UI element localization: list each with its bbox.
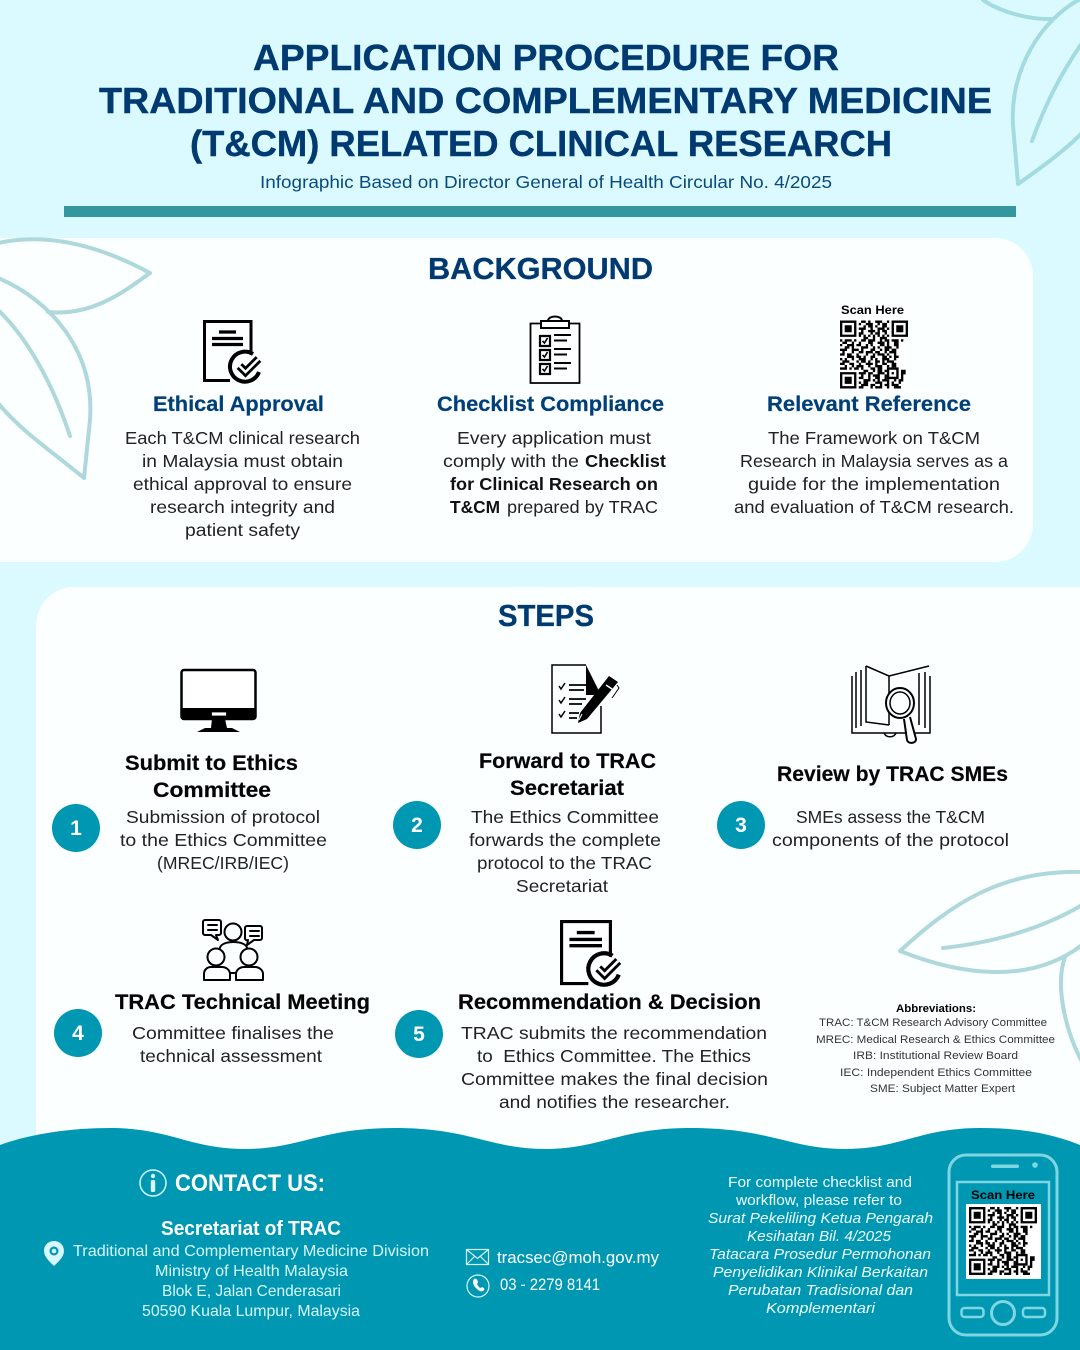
decorative leaf: steps panel xyxy=(900,872,1080,1062)
text: address xyxy=(73,1243,429,1320)
icon: recommendation document with check xyxy=(562,922,619,985)
step number: 5 xyxy=(395,1010,443,1058)
abbreviations: SME: Subject Matter Expert xyxy=(870,1083,1015,1095)
text: complete checklist reference: Tatacara Prosedur Permohonan xyxy=(709,1247,931,1263)
text: ethics committee forwards xyxy=(469,807,661,896)
text: ethical approval: in Malaysia must obtain xyxy=(142,451,343,471)
abbreviations: IEC: Independent Ethics Committee xyxy=(840,1067,1032,1079)
text: ethical approval: patient safety xyxy=(185,520,300,540)
heading: submit to ethics committee: Submit to Ethics xyxy=(125,752,298,775)
icon: computer monitor xyxy=(182,670,256,732)
title divider bar xyxy=(64,206,1016,217)
text: complete checklist reference: Surat Pekeliling Ketua Pengarah xyxy=(708,1211,933,1227)
text: checklist compliance: Checklist xyxy=(585,451,666,471)
text: checklist compliance: comply with the xyxy=(443,451,579,471)
text: trac submits: TRAC submits the recommendation xyxy=(461,1023,767,1043)
panel: background xyxy=(0,238,1033,562)
text: ethical approval: ethical approval to ensure xyxy=(133,474,352,494)
heading: checklist compliance: Checklist Compliance xyxy=(437,393,664,416)
step number: 3: 3 xyxy=(735,814,747,837)
icon: info xyxy=(140,1170,166,1196)
text: ethical approval: Each T&CM clinical research xyxy=(125,428,360,448)
text: address: Traditional and Complementary Medicine Division xyxy=(73,1243,429,1260)
scan here label: Scan Here xyxy=(971,1188,1035,1202)
text: smes assess: components of the protocol xyxy=(772,830,1009,850)
step number: 2: 2 xyxy=(411,814,423,837)
heading: relevant reference: Relevant Reference xyxy=(767,393,971,416)
icon: location pin xyxy=(44,1241,64,1266)
abbreviations: TRAC: T&CM Research Advisory Committee xyxy=(819,1017,1047,1029)
icon: technical meeting group xyxy=(203,920,263,980)
icon: smartphone with qr code xyxy=(949,1155,1057,1335)
panel: steps xyxy=(36,587,1080,1207)
heading: contact us: CONTACT US: xyxy=(175,1170,325,1197)
text: committee finalises: technical assessment xyxy=(140,1046,322,1066)
decorative leaf: top right xyxy=(983,0,1080,184)
title: APPLICATION PROCEDURE FOR xyxy=(253,37,839,78)
text: ethical approval xyxy=(125,428,360,540)
text: trac submits: and notifies the researcher. xyxy=(499,1092,730,1112)
text: smes assess: SMEs assess the T&CM xyxy=(796,807,985,827)
heading: ethical approval: Ethical Approval xyxy=(153,393,324,416)
text: ethics committee forwards: Secretariat xyxy=(516,876,608,896)
text: ethical approval: research integrity and xyxy=(150,497,335,517)
abbreviations xyxy=(816,1003,1055,1095)
heading: forward to trac secretariat: Forward to TRAC xyxy=(479,750,656,773)
text: address: Blok E, Jalan Cenderasari xyxy=(162,1283,341,1300)
text: address: Ministry of Health Malaysia xyxy=(155,1263,348,1280)
text: trac submits xyxy=(461,1023,768,1112)
text: checklist compliance: Every application must xyxy=(457,428,651,448)
abbreviations: Abbreviations: xyxy=(896,1003,976,1015)
heading: secretariat of trac: Secretariat of TRAC xyxy=(161,1218,341,1240)
step 1 xyxy=(52,752,327,873)
heading: forward to trac secretariat: Secretariat xyxy=(510,777,624,800)
icon: open book and magnifier xyxy=(852,666,930,743)
text: complete checklist reference: Kesihatan Bil. 4/2025 xyxy=(747,1229,892,1245)
step number: 4: 4 xyxy=(72,1022,84,1045)
step number: 1: 1 xyxy=(70,817,82,840)
text: complete checklist reference: Penyelidikan Klinikal Berkaitan xyxy=(713,1265,928,1281)
text: submission of protocol: to the Ethics Committee xyxy=(120,830,327,850)
abbreviations: IRB: Institutional Review Board xyxy=(853,1050,1018,1062)
decorative leaf: background panel xyxy=(0,239,150,478)
heading: review by trac smes: Review by TRAC SMEs xyxy=(777,763,1008,786)
text: complete checklist reference: For complete checklist and xyxy=(728,1175,912,1191)
qr code: circular xyxy=(966,1204,1041,1279)
text: address: 50590 Kuala Lumpur, Malaysia xyxy=(142,1303,360,1320)
text: trac submits: to Ethics Committee. The Ethics xyxy=(477,1046,751,1066)
icon: document and pen xyxy=(552,665,619,733)
qr code: relevant reference: Scan Here xyxy=(841,303,904,317)
title xyxy=(99,37,992,164)
step number: 1 xyxy=(52,804,100,852)
text: email: tracsec@moh.gov.my xyxy=(497,1249,660,1267)
text: checklist compliance: for Clinical Research on xyxy=(450,474,658,494)
text: relevant reference xyxy=(734,428,1014,517)
text: checklist compliance: prepared by TRAC xyxy=(507,497,658,517)
text: phone number: 03 - 2279 8141 xyxy=(500,1276,600,1294)
text: trac submits: Committee makes the final decision xyxy=(461,1069,768,1089)
step number: 3 xyxy=(717,801,765,849)
icon: document with check xyxy=(204,322,259,382)
text: ethics committee forwards: The Ethics Committee xyxy=(471,807,659,827)
text: complete checklist reference: workflow, please refer to xyxy=(735,1193,902,1209)
text: complete checklist reference: Perubatan Tradisional dan xyxy=(728,1283,913,1299)
heading: forward to trac secretariat xyxy=(479,750,656,800)
heading: steps: STEPS xyxy=(498,598,594,633)
text: relevant reference: guide for the implementation xyxy=(748,474,1000,494)
text: smes assess xyxy=(772,807,1009,850)
step 2 xyxy=(393,750,661,896)
title: TRADITIONAL AND COMPLEMENTARY MEDICINE xyxy=(99,80,992,121)
step number: 5: 5 xyxy=(413,1023,425,1046)
heading: background: BACKGROUND xyxy=(428,251,653,286)
text: submission of protocol xyxy=(120,807,327,873)
text: committee finalises: Committee finalises the xyxy=(132,1023,334,1043)
text: ethics committee forwards: forwards the complete xyxy=(469,830,661,850)
step 4 xyxy=(54,991,370,1066)
step 3 xyxy=(717,763,1009,850)
text: relevant reference: and evaluation of T&CM research. xyxy=(734,497,1014,517)
text: complete checklist reference: Komplementari xyxy=(766,1301,876,1317)
qr code: relevant reference xyxy=(840,303,908,389)
heading: submit to ethics committee: Committee xyxy=(153,779,271,802)
heading: submit to ethics committee xyxy=(125,752,298,802)
subtitle: Infographic Based on Director General of Health Circular No. 4/2025 xyxy=(260,172,832,192)
text: submission of protocol: (MREC/IRB/IEC) xyxy=(157,853,289,873)
text: complete checklist reference xyxy=(708,1175,933,1317)
step number: 2 xyxy=(393,801,441,849)
title: (T&CM) RELATED CLINICAL RESEARCH xyxy=(190,123,892,164)
text: ethics committee forwards: protocol to the TRAC xyxy=(477,853,652,873)
heading: trac technical meeting: TRAC Technical Meeting xyxy=(115,991,370,1014)
text: checklist compliance: T&CM xyxy=(450,497,500,517)
abbreviations: MREC: Medical Research & Ethics Committee xyxy=(816,1034,1055,1046)
text: checklist compliance xyxy=(443,428,666,517)
icon: telephone xyxy=(467,1275,489,1297)
text: relevant reference: The Framework on T&CM xyxy=(768,428,980,448)
text: relevant reference: Research in Malaysia serves as a xyxy=(740,451,1008,471)
step number: 4 xyxy=(54,1009,102,1057)
heading: recommendation and decision: Recommendation & Decision xyxy=(458,991,761,1014)
step 5 xyxy=(395,991,768,1112)
text: submission of protocol: Submission of protocol xyxy=(126,807,320,827)
footer panel xyxy=(0,1128,1080,1350)
text: committee finalises xyxy=(132,1023,334,1066)
icon: clipboard checklist xyxy=(530,316,580,383)
icon: mail xyxy=(466,1250,488,1264)
